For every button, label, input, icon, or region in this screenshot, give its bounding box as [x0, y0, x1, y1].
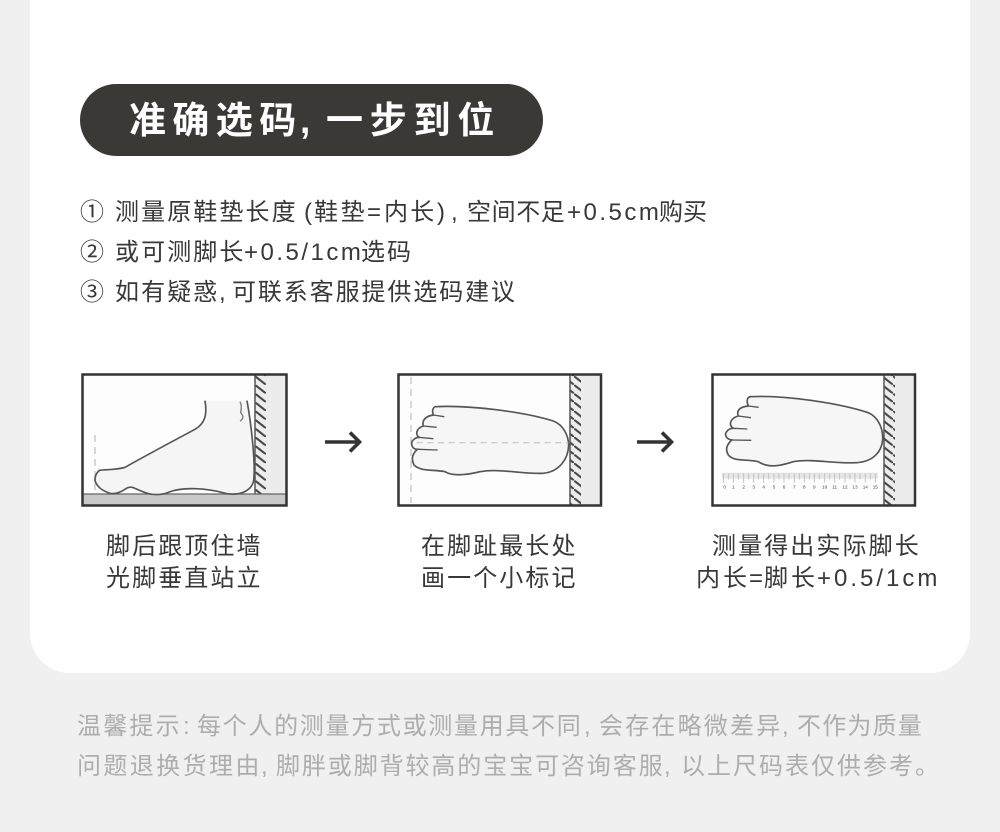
heading pill: 准确选码	[129, 100, 303, 141]
step 1 text: 内长	[384, 198, 437, 226]
caption row 1	[106, 533, 921, 560]
arrow 1	[325, 432, 360, 452]
diagram 3: foot with ruler: 4	[762, 485, 765, 490]
diagram 3: foot with ruler: 11	[832, 485, 837, 490]
diagram 3: foot with ruler: 5	[773, 485, 776, 490]
step 1 text: =	[367, 198, 381, 226]
footer line 2: ,	[261, 753, 268, 780]
diagram 3: foot with ruler: 10	[822, 485, 828, 490]
diagram 3: foot with ruler: 3	[752, 485, 755, 490]
footer note	[77, 713, 941, 780]
caption row 2	[106, 565, 940, 592]
diagram 3: foot with ruler: 8	[803, 485, 806, 490]
step 1 text	[80, 198, 707, 226]
step 1 text: ,	[451, 198, 458, 226]
diagram 3: foot with ruler: 6	[783, 485, 786, 490]
footer line 2: ,	[664, 753, 671, 780]
step text block	[80, 198, 707, 306]
diagram 3: foot with ruler: 15	[873, 485, 878, 490]
step 2 text: 或可测脚长	[115, 238, 246, 266]
footer line 1: ,	[782, 713, 789, 740]
diagram 3: foot with ruler: 9	[813, 485, 816, 490]
diagram 3: foot with ruler: 1	[732, 485, 735, 490]
caption row 2: +0.5/1cm	[817, 565, 940, 592]
heading pill: ,	[300, 100, 310, 141]
step 1 text: +0.5cm	[567, 198, 661, 226]
footer line 2: 以上尺码表仅供参考。	[681, 753, 941, 780]
step 1 text: 测量原鞋垫长度	[115, 198, 298, 226]
diagram 1: heel against wall, side view	[82, 374, 286, 506]
footer line 1: :	[183, 713, 190, 740]
captions block	[106, 533, 940, 592]
caption row 2: =	[749, 565, 763, 592]
caption row 1: 在脚趾最长处	[421, 533, 578, 560]
footer line 1: 不作为质量	[797, 713, 923, 740]
heading pill	[80, 84, 543, 156]
arrow 2	[637, 432, 672, 452]
diagram 3: foot with ruler: 14	[863, 485, 868, 490]
footer line 1	[77, 713, 923, 740]
step 1 text: )	[437, 198, 445, 226]
diagram 3: foot with ruler: 13	[852, 485, 858, 490]
step 1 text: 空间不足	[467, 198, 565, 226]
caption row 2: 内长	[696, 565, 750, 592]
footer line 1: 温馨提示	[77, 713, 182, 740]
step 3 text: 如有疑惑	[115, 278, 219, 306]
diagram 3: foot with ruler: 0	[723, 485, 726, 490]
step 1 text: ①	[80, 198, 104, 226]
step 2 text: ②	[80, 238, 104, 266]
step 3 text: ③	[80, 278, 104, 306]
diagram 2: foot sole, top view	[398, 374, 601, 506]
footer line 2: 问题退换货理由	[77, 753, 262, 780]
step 2 text: 选码	[361, 238, 413, 266]
diagram 3: foot with ruler	[712, 374, 915, 506]
diagram 3: foot with ruler: 2	[742, 485, 745, 490]
step 1 text: 鞋垫	[314, 198, 367, 226]
caption row 2: 脚长	[764, 565, 818, 592]
step 2 text: +0.5/1cm	[244, 238, 363, 266]
footer line 1: ,	[584, 713, 591, 740]
diagram 3: foot with ruler: 12	[842, 485, 848, 490]
caption row 2: 光脚垂直站立	[106, 565, 263, 592]
step 2 text	[80, 238, 413, 266]
panel: white card	[30, 0, 970, 673]
step 1 text: 购买	[659, 198, 707, 226]
step 3 text: ,	[219, 278, 226, 306]
footer line 1: 每个人的测量方式或测量用具不同	[197, 713, 582, 740]
footer line 1: 会存在略微差异	[599, 713, 782, 740]
footer line 2: 脚胖或脚背较高的宝宝可咨询客服	[276, 753, 664, 780]
footer line 2	[77, 753, 941, 780]
caption row 2: 画一个小标记	[421, 565, 578, 592]
heading pill: 一步到位	[326, 100, 501, 141]
step 1 text: (	[304, 198, 312, 226]
step 3 text	[80, 278, 517, 306]
step 3 text: 可联系客服提供选码建议	[232, 278, 517, 306]
caption row 1: 脚后跟顶住墙	[106, 533, 263, 560]
caption row 1: 测量得出实际脚长	[712, 533, 921, 560]
diagram 3: foot with ruler: 7	[793, 485, 796, 490]
